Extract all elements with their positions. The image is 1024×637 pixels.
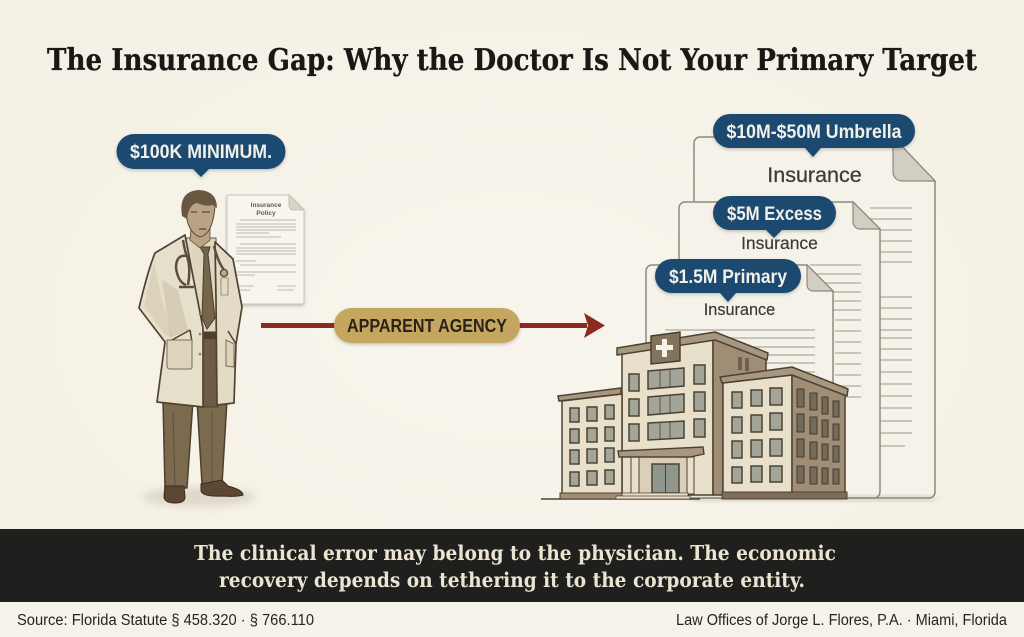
back document: umbrella [694,137,935,498]
right wing front and side [723,375,792,495]
callout: $100K minimum: $100K MINIMUM. [130,142,272,163]
shirt [186,238,218,345]
sign with cross [651,332,680,364]
shoes [164,486,185,503]
front document: primary [646,265,833,498]
caption text: recovery depends on tethering it to the corporate entity. [219,568,805,592]
panel: insurance tower stack [646,114,935,498]
icon: insurance policy document: Insurance [251,202,282,209]
caption band [0,529,1024,602]
panel: physician side [117,134,304,507]
neck [190,228,210,248]
left wing [562,394,622,495]
tie [200,247,215,329]
source note: Source: Florida Statute § 458.320 · § 766.110 [17,612,314,629]
label pill: apparent agency [334,308,520,343]
head [186,195,215,237]
callout: $5M excess: $5M Excess [727,203,822,225]
front document: primary: Insurance [704,301,775,319]
middle document: excess [679,202,880,498]
callout: $1.5M primary [655,259,801,302]
callout: $1.5M primary: $1.5M Primary [669,266,787,288]
callout: $100K minimum [117,134,285,177]
footer [0,602,1024,637]
callout: $10M-$50M umbrella [713,114,915,157]
callout: $10M-$50M umbrella: $10M-$50M Umbrella [726,121,902,143]
windows [570,365,782,486]
icon: doctor in lab coat [139,190,256,507]
arrow: apparent agency [261,308,605,343]
middle document: excess: Insurance [741,233,818,253]
icon: insurance policy document: Policy [256,210,276,217]
callout: $5M excess [713,196,836,238]
label pill: apparent agency: APPARENT AGENCY [347,316,507,336]
back document: umbrella: Insurance [767,163,862,187]
coat [139,235,203,407]
stethoscope [176,240,224,285]
entrance [636,457,691,493]
central block [622,338,713,495]
caption text: The clinical error may belong to the physician. The economic [194,541,836,565]
law office credit: Law Offices of Jorge L. Flores, P.A. · Miami, Florida [676,612,1007,629]
icon: insurance policy document [227,195,304,304]
icon: hospital building [541,332,935,500]
trousers [163,400,193,488]
